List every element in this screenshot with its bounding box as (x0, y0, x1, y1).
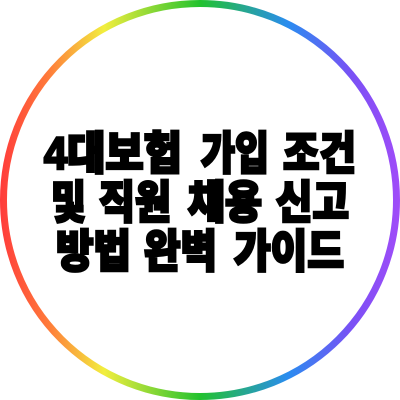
title line 2: 채용 (188, 177, 262, 228)
title line 3 (56, 226, 344, 277)
title line 2: 및 (51, 177, 86, 228)
title line 1: 조건 (283, 128, 356, 179)
title line 1 (44, 128, 356, 179)
title (44, 128, 356, 277)
title line 1: 4대보험 (44, 128, 182, 179)
title line 1: 가입 (201, 128, 269, 179)
title line 3: 방법 (56, 226, 131, 277)
title line 3: 완벽 (144, 226, 217, 277)
title line 2 (51, 177, 349, 228)
title line 2: 신고 (276, 177, 349, 228)
title line 3: 가이드 (234, 226, 344, 277)
title line 2: 직원 (99, 177, 171, 228)
